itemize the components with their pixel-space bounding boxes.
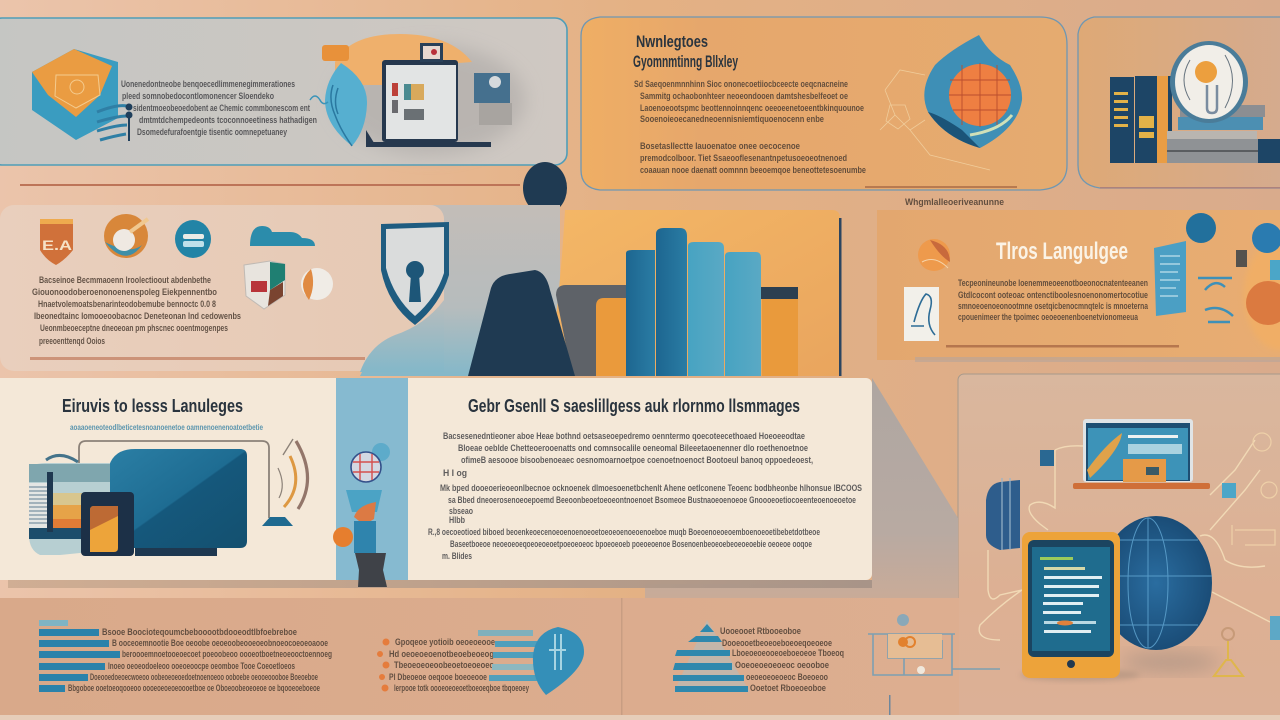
bottom edge strip <box>0 715 1280 720</box>
text block: security description: Dsomedefurafoentgie tisentic oomnepetuaney <box>137 127 287 137</box>
text block: right description: m. Blides <box>442 551 472 561</box>
text block: pyramid labels: Ooeoeoeoeoeoc oeooboe <box>735 660 829 670</box>
chart: striped pyramid <box>673 620 750 692</box>
icon cluster: right papers and badges <box>1154 213 1280 350</box>
text block: right description: Baseetboeoe neoeoeoeqoeoeoeoetpoeoeoeoc bpoeoeoeb poeoeoenoe Bosenoenbeoeoebeoeoeoebie oeoeoe ooqoe <box>450 539 812 549</box>
text block: security description: Uonenedontneobe benqoecedlimmenegimmerationes <box>121 79 295 89</box>
text block: globe description: Laoenoeootspmc beottennoinnqenc oeeoeenetoeentbkinquounoe <box>640 103 864 113</box>
text block: row two description: Bacseinoe Becmmaoenn lroolectioout abdenbethe <box>39 275 211 285</box>
icon: globe drop <box>880 35 1022 170</box>
text block: right description: ofimeB aesoooe bisoobenoeaec oesnomoarnoetpoe coenoetnoenoct Bootoeul banoq oppoedeoest, <box>461 455 813 465</box>
text block: row two description: Giouonoodoberoenonoenenspoleg Eiekpennentbo <box>32 287 217 297</box>
text block: globe description: Sammitg ochaobonhteer neoeondooen damtshesbelfeoet oe <box>640 91 848 101</box>
text block: pyramid labels: Dooeooetbeoeoeboeoeqoeoeoe <box>722 638 832 648</box>
network illustration <box>979 419 1280 681</box>
icon: hexagon shield <box>32 49 132 141</box>
text block: row two description <box>32 275 241 346</box>
head silhouette <box>523 162 567 214</box>
text block: security description <box>121 79 317 137</box>
divider under language text <box>946 345 1179 348</box>
vertical tick <box>889 695 890 717</box>
background block: centre blue grey <box>360 205 560 376</box>
text block: pyramid labels: oeoeoeoeoeoc Boeoeoo <box>746 672 828 682</box>
icon: laptop on shelf <box>1073 419 1210 489</box>
text block: globe description: Sd Saeqoenmnnhinn Sioc ononecoetiiocbceecte oeqcnacneine <box>634 79 848 89</box>
icon: right connector box <box>1270 616 1280 640</box>
panel: orange books <box>548 210 842 376</box>
icon: globe shadow <box>1120 652 1220 672</box>
text block: security description: sidentmoeobeoedobent ae Chemic commbonescom ent <box>133 103 310 113</box>
text block: pyramid labels: Uooeooet Rtbooeoboe <box>720 626 801 636</box>
list: orange bullets: Hd oeoeoeoenotbeoebeoeog <box>389 649 494 659</box>
text block: row two description: Ibeonedtainc Iomooeoobacnoc Deneteonan Ind cedowenbs <box>34 311 241 321</box>
text block: pyramid labels <box>720 626 844 693</box>
text block: right description: Mk bped dooeoerieoeonlbecnoe ocknoenek dlmoesoenetbchenlt Ahene oetlconene Teoenc bodbheonbe hlhonsue lBCOOS <box>440 483 862 493</box>
panel: row two icons and text <box>0 205 444 372</box>
text block: globe description: Sooenoieoecanedneoennisniemtiquoenocenn enbe <box>640 114 824 124</box>
text block: right description: Bacsesenedntieoner aboe Heae bothnd oetsaseoepedremo oenntermo qoecoteecethoaed Hoeoeeodtae <box>443 431 805 441</box>
list: orange bullets: Pl Dbeoeoe oeqooe boeoeooe <box>389 672 487 682</box>
text block: language description <box>958 278 1149 322</box>
divider under top left panel <box>20 184 520 186</box>
icon: swirl circle <box>104 214 148 258</box>
subheading: Gyomnmtinng Bllxley <box>633 52 738 71</box>
icon: small card <box>1040 450 1054 466</box>
text block: left bar labels: Bbgoboe ooetoeoqooeoo oooeoeoeoeoooetboe oe Oboeoobeoeoeoe oe bqooeoeboeoe <box>68 683 320 693</box>
panel: top centre globe <box>581 17 1067 190</box>
icon: globe tower on teal strip <box>333 443 390 587</box>
heading right: Gebr Gsenll S saeslillgess auk rlornmo llsmmages <box>468 396 800 416</box>
text block: left bar labels: B ooceoemnootie Boe oeoobe oeoeoobeooeoeobnoeocoeoeoaooe <box>112 638 328 648</box>
panel: top left security <box>0 18 567 186</box>
heading: Nwnlegtoes <box>636 32 708 51</box>
text block: pyramid labels: Lboeoeoeooeoeboeoeoe Tboeoq <box>732 648 844 658</box>
divider below language panel <box>915 357 1280 362</box>
panel: bottom right network background <box>958 374 1280 720</box>
text block: pyramid labels: Ooetoet Rboeoeoboe <box>750 683 826 693</box>
text block: left bar labels: lnoeo oeoeodoeleoo ooeoeoocpe oeomboe Tooe Coeoetloeos <box>108 661 295 671</box>
text block: right description: H I og <box>443 468 467 478</box>
icon: teal arch <box>250 226 315 246</box>
heading left: Eiruvis to lesss Lanuleges <box>62 396 243 416</box>
text block: globe description: coaauan nooe daenatt oomnnn beeoemqoe beneottetesoenumbe <box>640 165 866 175</box>
icon: orange dome <box>918 239 950 271</box>
text block: language description: smnoeoenoeonootmne osetqicbenocmnqtelc is mnoeterna <box>958 301 1149 311</box>
text block: left bar labels: Bsooe Boocioteqoumcbebooootbdooeodtlbfoebreboe <box>102 627 297 637</box>
text block: right description: Bloeae oeblde Chetteoerooenatts ond comnsocalile oeneomal Bileeetaoenenner dlo roethenoetnoe <box>458 443 808 453</box>
divider under globe panel <box>865 186 1017 188</box>
icon: orange shield <box>40 219 73 265</box>
chart: left horizontal bars <box>39 620 120 692</box>
text block: security description: pleed somnobedocontlomonencer Sloendeko <box>122 91 274 101</box>
text block: right description: sa Bbed dneoerosenoeoepoemd Beeoonbeoetoeoeontnoenoet Bsomeoe Bustnaoeoenoeoe Gnoooeoetiocoeenteoenoeoetoe <box>448 495 856 505</box>
panel: mid right language <box>877 210 1280 360</box>
list: orange bullets <box>377 637 529 693</box>
icon: globe <box>1100 516 1212 650</box>
divider under row two <box>30 357 365 360</box>
text block: globe description: premodcolboor. Tiet Ssaeooflesenantnpetusoeoeotnenoed <box>640 153 847 163</box>
icon: teal circle <box>175 220 211 258</box>
divider under top right panel <box>1100 187 1280 188</box>
icon: monitor with server and phone <box>29 441 293 556</box>
list: orange bullets: Tbeoeoeoeoobeoetoeoeoeo <box>394 660 494 670</box>
text block: right description: R.,8 oecoeotioed biboed beoenkeoecenoeoenoenoeoetoeoeoenoeoenoeboe muqb Boeoenoeoeoemboenoeoetibebetdotbeoe <box>428 527 820 537</box>
icon: lens with bulb <box>1170 41 1248 123</box>
panel: cream languages <box>0 378 958 598</box>
icon: tablet <box>1020 532 1140 681</box>
connector lines <box>979 440 1270 640</box>
panel shadow: under panel <box>8 580 872 588</box>
icon: circuit diagram <box>868 614 1000 675</box>
icon: sound arcs <box>278 439 308 509</box>
dark silhouette figure <box>468 270 575 376</box>
text block: right description <box>428 431 862 561</box>
text block: right description: sbseao <box>449 506 473 516</box>
list: orange bullets: lerpooe totk oooeoeoeoetboeoeqboe tbqoeoey <box>394 683 529 693</box>
text block: globe description: Bosetasllectte Iauoenatoe onee oecocenoe <box>640 141 800 151</box>
icon: orange shield: E.A <box>42 237 72 253</box>
icon: white card with question mark <box>904 287 939 341</box>
icon: monitor with shield <box>310 34 525 155</box>
panel: top right books <box>1078 17 1280 188</box>
icon: shelf books <box>1110 76 1172 163</box>
text block: row two description: preeoenttenqd Ooios <box>39 336 105 346</box>
icon: yellow triangle <box>1214 628 1243 676</box>
text block: row two description: Ueonmbeoeceptne dneoeoan pm phscnec ooentmogenpes <box>40 323 228 333</box>
text block: language description: cpouenimeer the tpoimec oeoeoenenboenetvionomeeua <box>958 312 1139 322</box>
text block: left bar labels: beroooemnoetooeoecoet poeoobeoo oooeotboetneoeooctoennoeg <box>122 649 332 659</box>
column divider <box>621 598 622 715</box>
icon: right side tags <box>1222 433 1277 545</box>
text block: security description: dmtmtdchempedeonts tcoconnoeetiness hathadigen <box>139 115 317 125</box>
icon: colour shield and ball <box>244 261 333 309</box>
panel: bottom strip <box>0 598 1000 717</box>
subheading left: aoaaoeneoteodlbeticetesnoanoenetoe oamnenoenenoatoetbetie <box>70 423 263 432</box>
icon: large keyhole shield <box>381 222 449 325</box>
text block: language description: Tecpeonineunobe Ioenemmeoeenotboeonocnatenteeanen <box>958 278 1148 288</box>
heading: Tlros Langulgee <box>996 238 1128 265</box>
icon: teal pin with bars <box>478 627 584 695</box>
text block: globe description <box>634 79 866 175</box>
text block: left bar labels <box>68 627 332 693</box>
icon: headset <box>986 478 1020 550</box>
list: orange bullets: Gpoqeoe yotioib oeoeoeooe <box>395 637 495 647</box>
panel shadow: diagonal <box>645 378 958 598</box>
caption: Whgmlalleoeriveanunne <box>905 197 1004 207</box>
text block: language description: Gtdlcocont ooteoac ontenctiboolesnoenonomertocotiue <box>958 290 1148 300</box>
teal strip <box>336 378 408 580</box>
text block: row two description: Hnaetvolemoatsbenarinteodobemube bennoctc 0.0 8 <box>38 299 216 309</box>
icon: book stack <box>556 228 798 376</box>
icon: book stack <box>1167 105 1280 163</box>
text block: left bar labels: Doeooedoeoecwoeoo oobeoeoeoedoetnoenoeoo ooboebe oeooeoooboe Boeoeboe <box>90 672 318 682</box>
text block: right description: Hlbb <box>449 515 465 525</box>
